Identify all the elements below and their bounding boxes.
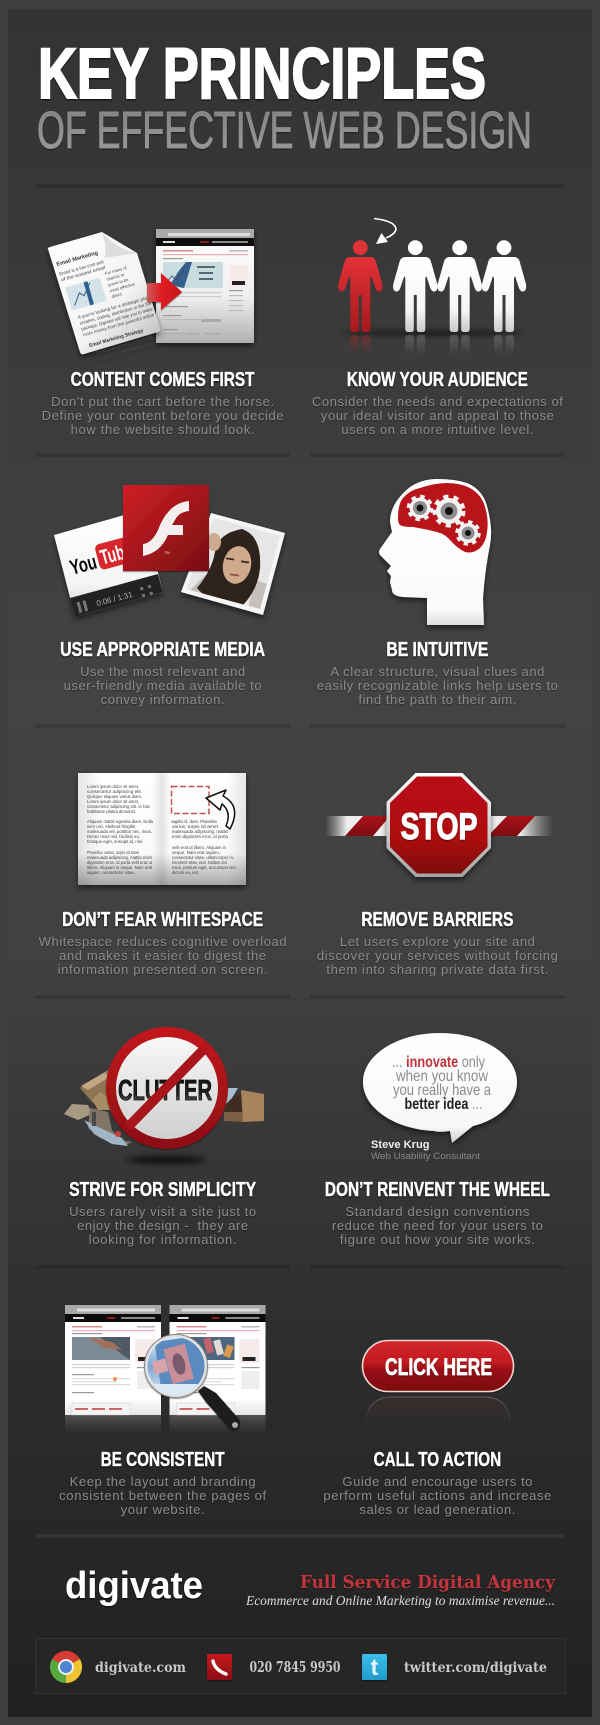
panel: strive for simplicity [64, 1027, 264, 1247]
icon: phone [207, 1654, 232, 1680]
icon: chrome [50, 1651, 82, 1683]
sign [106, 1027, 228, 1149]
description [312, 394, 563, 437]
description: your website. [121, 1502, 205, 1517]
white person 2 [438, 240, 482, 410]
description: looking for information. [89, 1232, 237, 1247]
agency tagline: Full Service Digital Agency [300, 1572, 555, 1593]
sign: CLUTTER [118, 1075, 212, 1107]
stop sign [386, 773, 491, 877]
heading: BE CONSISTENT [101, 1449, 225, 1471]
icon: speech bubble quote [363, 1033, 517, 1161]
icon: twitter: t [371, 1654, 379, 1680]
heading: DON’T FEAR WHITESPACE [62, 909, 263, 931]
description: Whitespace reduces cognitive overload [39, 934, 287, 949]
reflection [65, 1415, 266, 1433]
footer [36, 1565, 566, 1694]
description [39, 934, 287, 977]
left page text: Aliquam mattis egestas diam. Nulla [87, 819, 154, 824]
description: Use the most relevant and [80, 664, 245, 679]
right page text: neque. Nam erat sapien, [172, 850, 220, 855]
heading: USE APPROPRIATE MEDIA [60, 639, 265, 661]
debris left [64, 1070, 132, 1146]
description: discover your services without forcing [317, 948, 558, 963]
panel: use appropriate media [54, 485, 285, 707]
description [332, 1204, 543, 1247]
quote text: when you know [395, 1068, 488, 1085]
panel: don't fear whitespace [39, 773, 287, 977]
white person 3 [482, 240, 526, 410]
flash logo: TM [164, 550, 170, 555]
left page text: Phasellus varius, turpis sit amet [87, 850, 140, 855]
red person [338, 240, 382, 410]
left page text: malesuada vel, porttitor nec, risus. [87, 829, 152, 834]
arrow to placeholder [206, 790, 235, 829]
description: user-friendly media available to [64, 678, 262, 693]
quote text: better idea ... [404, 1096, 482, 1113]
description: convey information. [101, 692, 225, 707]
twitter handle: twitter.com/digivate [404, 1660, 547, 1676]
left page text [87, 784, 154, 875]
document: Do you want to send out a weekly [95, 334, 154, 356]
description: them into sharing private data first. [326, 962, 548, 977]
head silhouette [379, 479, 491, 625]
right page text: enim dignissim eros, id porta [172, 834, 229, 839]
panel: content comes first [42, 229, 284, 437]
description: Users rarely visit a site just to [69, 1204, 256, 1219]
left page text: consectetur adipiscing elit. [87, 789, 142, 794]
icon: two pages with magnifier [65, 1305, 266, 1433]
description: information presented on screen. [58, 962, 268, 977]
quote text: ... innovate only [392, 1054, 485, 1071]
description: Guide and encourage users to [342, 1474, 532, 1489]
panel: be consistent [59, 1305, 266, 1517]
page left [65, 1305, 161, 1415]
quote attribution: Web Usability Consultant [371, 1151, 481, 1161]
contact bar [36, 1638, 566, 1694]
left page text: dignissim eros, id porta velit erat ut [87, 860, 153, 865]
document: direct [111, 291, 123, 299]
document: prove to be [108, 277, 130, 288]
right page text: velit erat ut libero. Aliquam in [172, 845, 227, 850]
document: Email Marketing [56, 250, 99, 268]
arrow [147, 273, 182, 310]
debris right [224, 1088, 264, 1122]
right page text: sagittis id, diam. Phasellus [171, 819, 217, 824]
icon: no clutter sign [64, 1027, 264, 1164]
video player card [54, 510, 163, 617]
document: creative, coding, distribution or the full [79, 301, 152, 326]
left page text: malesuada adipiscing, mattis enim [87, 855, 152, 860]
curved arrow [374, 218, 396, 244]
page right [170, 1305, 266, 1415]
ground shadow [126, 1156, 206, 1164]
right page text: varius, turpis sit amet [172, 824, 219, 829]
web page [156, 229, 254, 343]
description: your ideal visitor and appeal to those [321, 408, 554, 423]
right page text: hendrerit vitae, erat. Nullam nisl [172, 860, 227, 865]
heading: STRIVE FOR SIMPLICITY [69, 1179, 257, 1201]
panel: be intuitive [317, 479, 558, 707]
description [59, 1474, 266, 1517]
website: digivate.com [95, 1660, 186, 1676]
panel: know your audience [312, 218, 563, 437]
description: A clear structure, visual clues and [330, 664, 544, 679]
heading: CONTENT COMES FIRST [71, 369, 255, 391]
button body [362, 1340, 514, 1392]
dashed placeholder [172, 786, 209, 814]
right page text [171, 819, 237, 875]
description: Consider the needs and expectations of [312, 394, 563, 409]
white person 1 [393, 240, 438, 410]
description: reduce the need for your users to [332, 1218, 543, 1233]
icon: stop sign barrier [325, 773, 553, 877]
quote attribution: Steve Krug [371, 1139, 430, 1151]
icon: people [338, 218, 526, 410]
description: users on a more intuitive level. [341, 422, 533, 437]
left page text: tristique eget, suscipit id, nisl. [87, 839, 143, 844]
description [323, 1474, 551, 1517]
left page text: libero. Aliquam in neque. Nam erat [87, 865, 153, 870]
photo card [181, 513, 285, 620]
icon: click here button [362, 1340, 514, 1425]
document: Email Marketing Strategy [89, 328, 144, 349]
description: enjoy the design - they are [77, 1218, 248, 1233]
heading: REMOVE BARRIERS [361, 909, 513, 931]
description: sales or lead generation. [359, 1502, 515, 1517]
quote text: you really have a [393, 1082, 491, 1099]
left page text: Quisque aliquam varius diam. [87, 794, 142, 799]
title [37, 35, 532, 160]
ground shadow [341, 330, 525, 336]
book pages [78, 773, 246, 885]
magnifier [144, 1334, 240, 1430]
left page text: consectetur adipiscing elit. In hac [87, 804, 151, 809]
icon: document to web page [48, 229, 254, 365]
left page text: sem orci, eleifend fringilla [87, 824, 136, 829]
heading: BE INTUITIVE [386, 639, 488, 661]
gear 2 [434, 496, 464, 526]
panel: call to action [323, 1340, 551, 1517]
barrier [325, 816, 553, 836]
right page text: risus, pretium eget, accumsan nec, [172, 865, 237, 870]
right page text: consectetur vitae, ullamcorper in, [172, 855, 234, 860]
agency subline: Ecommerce and Online Marketing to maximise revenue... [245, 1593, 555, 1608]
button reflection [366, 1397, 510, 1425]
description: and makes it easier to digest the [59, 948, 266, 963]
document: more money from this powerful online [82, 312, 155, 337]
description: consistent between the pages of [59, 1488, 266, 1503]
document: chance to [106, 272, 125, 282]
logo: digivate: digivate [65, 1565, 203, 1607]
document: most effective [109, 281, 136, 293]
description: perform useful actions and increase [323, 1488, 551, 1503]
document: of the easiest email [60, 265, 106, 282]
button label: CLICK HERE [385, 1354, 492, 1381]
left page text: sapien, consectetur vitae. [87, 870, 135, 875]
left page text: Donec risus nisl, facilisis eu, [87, 834, 140, 839]
video player card: Tube [98, 539, 135, 570]
bubble [363, 1033, 517, 1143]
description: easily recognizable links help users to [317, 678, 558, 693]
phone number: 020 7845 9950 [250, 1659, 340, 1676]
description: figure out how your site works. [340, 1232, 535, 1247]
panel: don't reinvent the wheel [325, 1033, 550, 1247]
quote text [392, 1054, 491, 1113]
document [48, 232, 163, 365]
left page text: Lorem ipsum dolor sit amet, [87, 784, 139, 789]
document: If you're looking for a strategic plan [77, 295, 150, 320]
heading: CALL TO ACTION [374, 1449, 501, 1471]
left page text: Lorem ipsum dolor sit amet, [87, 799, 139, 804]
document: Email is a low cost and [59, 259, 105, 277]
description: how the website should look. [71, 422, 255, 437]
brain [398, 483, 488, 552]
icon: media collage [54, 485, 285, 620]
description: Let users explore your site and [340, 934, 535, 949]
document: newsletter to your entire customer [97, 340, 156, 361]
stop text: STOP [400, 806, 478, 847]
document: package, Digivate will help you to make [81, 306, 154, 332]
video player card: 0:06 / 1:31 [95, 590, 134, 608]
right page text: dictum eu, est. [172, 870, 199, 875]
right page text: malesuada adipiscing, mattis [172, 829, 228, 834]
video player card: You [67, 551, 99, 580]
description [64, 664, 262, 707]
gear 3 [457, 522, 479, 544]
description [317, 934, 558, 977]
left page text: habitasse platea dictumst. [87, 809, 136, 814]
description [317, 664, 558, 707]
gear 1 [408, 496, 432, 520]
heading: KNOW YOUR AUDIENCE [347, 369, 528, 391]
description: Keep the layout and branding [70, 1474, 256, 1489]
flash logo [123, 485, 209, 571]
icon: head with gears [379, 479, 491, 625]
document: For many of [104, 265, 128, 276]
description: find the path to their aim. [358, 692, 516, 707]
description [42, 394, 284, 437]
panel: remove barriers [317, 773, 558, 977]
description: Don't put the cart before the horse. [51, 394, 274, 409]
icon: open book [78, 773, 246, 885]
quote attribution [371, 1139, 481, 1161]
icon: twitter [362, 1654, 387, 1680]
description: Define your content before you decide [42, 408, 284, 423]
description [69, 1204, 256, 1247]
description: Standard design conventions [345, 1204, 530, 1219]
